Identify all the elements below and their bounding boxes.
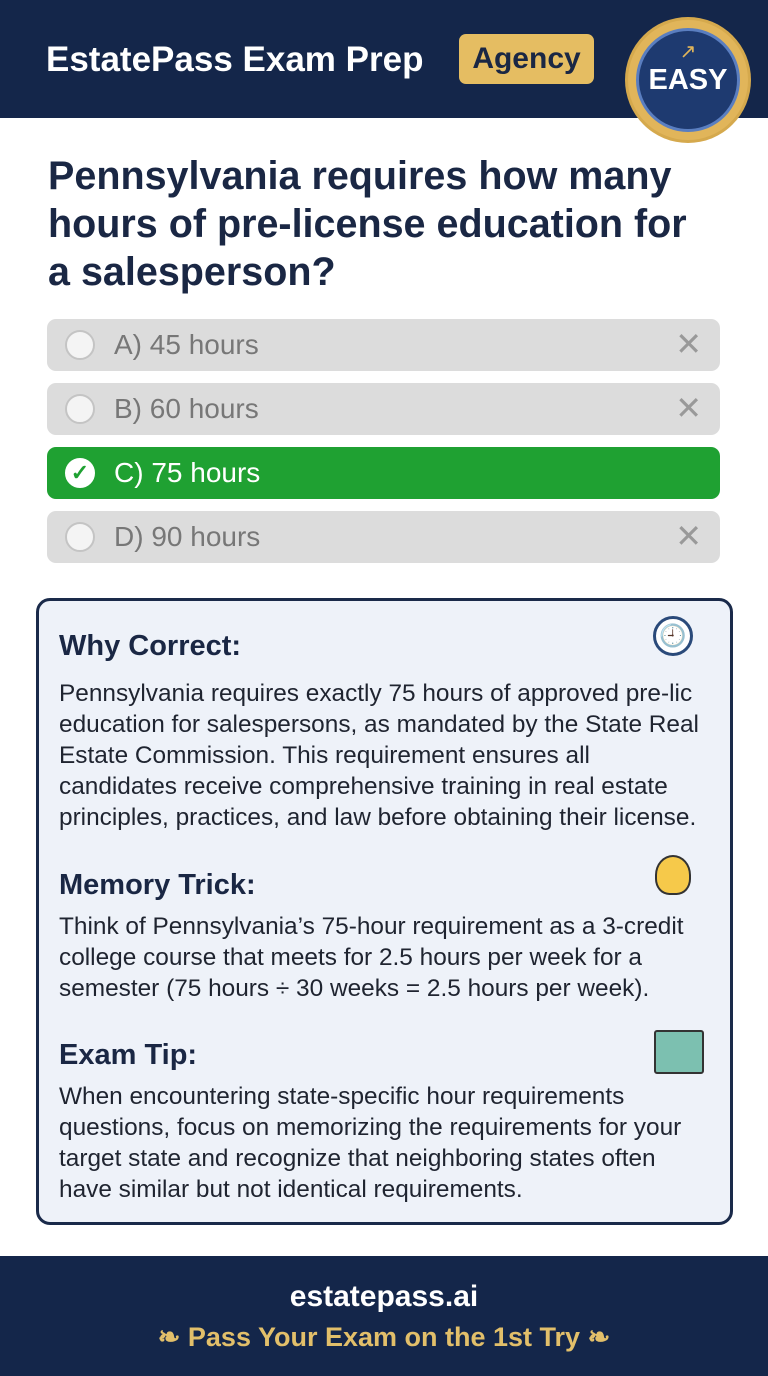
text: why correct xyxy=(59,680,699,831)
heading: exam tip: Exam Tip: xyxy=(59,1039,197,1071)
option D: D) 90 hours xyxy=(114,521,260,552)
question: hours of pre-license education for xyxy=(48,202,687,246)
text: memory trick: college course that meets for 2.5 hours per week for a xyxy=(59,944,642,971)
explanation panel xyxy=(36,598,733,1225)
option C correct: ✓ xyxy=(71,460,89,485)
text: exam tip: When encountering state-specific hour requirements xyxy=(59,1083,624,1110)
question: Pennsylvania requires how many xyxy=(48,154,671,198)
footer url: estatepass.ai xyxy=(290,1280,478,1313)
icon: clock: 🕘 xyxy=(659,623,687,648)
option B: B) 60 hours xyxy=(114,393,259,424)
brand title: EstatePass Exam Prep xyxy=(46,40,423,79)
option A: A) 45 hours xyxy=(114,329,259,360)
text: memory trick: semester (75 hours ÷ 30 weeks = 2.5 hours per week). xyxy=(59,975,649,1002)
text: why correct: principles, practices, and law before obtaining their license. xyxy=(59,804,696,831)
text: why correct: Estate Commission. This requirement ensures all xyxy=(59,742,590,769)
easy badge xyxy=(628,20,748,140)
option A: ✕ xyxy=(675,326,702,362)
option A xyxy=(47,319,720,371)
option D xyxy=(47,511,720,563)
text: exam tip: target state and recognize that neighboring states often xyxy=(59,1145,656,1172)
text: memory trick: Think of Pennsylvania’s 75-hour requirement as a 3-credit xyxy=(59,913,684,940)
icon: lightbulb xyxy=(655,855,691,895)
text: exam tip: questions, focus on memorizing the requirements for your xyxy=(59,1114,681,1141)
question: a salesperson? xyxy=(48,250,336,294)
text: memory trick xyxy=(59,913,684,1002)
option B: ✕ xyxy=(675,390,702,426)
option C correct: C) 75 hours xyxy=(114,457,260,488)
easy badge: ↗ xyxy=(680,41,696,63)
option D: ✕ xyxy=(675,518,702,554)
heading: why correct: Why Correct: xyxy=(59,630,241,662)
header bar xyxy=(0,0,768,118)
agency tag: Agency xyxy=(472,42,581,75)
text: why correct: candidates receive comprehensive training in real estate xyxy=(59,773,668,800)
footer tagline: ❧ Pass Your Exam on the 1st Try ❧ xyxy=(158,1322,610,1352)
heading: memory trick: Memory Trick: xyxy=(59,869,256,901)
easy badge: EASY xyxy=(648,64,727,96)
text: why correct: education for salespersons, as mandated by the State Real xyxy=(59,711,699,738)
text: exam tip xyxy=(59,1083,681,1203)
option C correct xyxy=(47,447,720,499)
agency tag xyxy=(459,34,594,84)
footer xyxy=(0,1256,768,1376)
icon: clock xyxy=(653,616,693,656)
icon: map xyxy=(654,1030,704,1074)
text: exam tip: have similar but not identical requirements. xyxy=(59,1176,523,1203)
option B xyxy=(47,383,720,435)
text: why correct: Pennsylvania requires exactly 75 hours of approved pre-lic xyxy=(59,680,692,707)
question xyxy=(48,154,687,294)
